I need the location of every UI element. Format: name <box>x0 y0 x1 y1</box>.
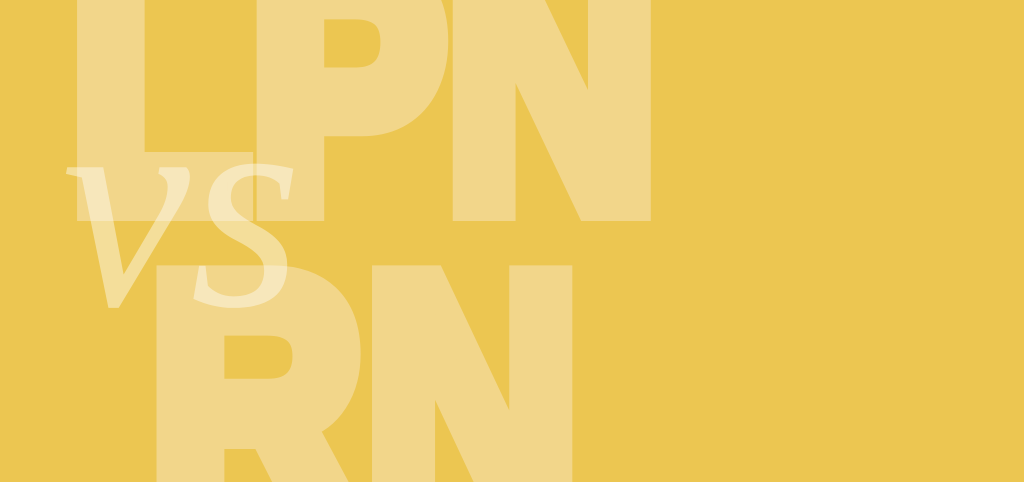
script word: vs: vs <box>62 38 302 370</box>
